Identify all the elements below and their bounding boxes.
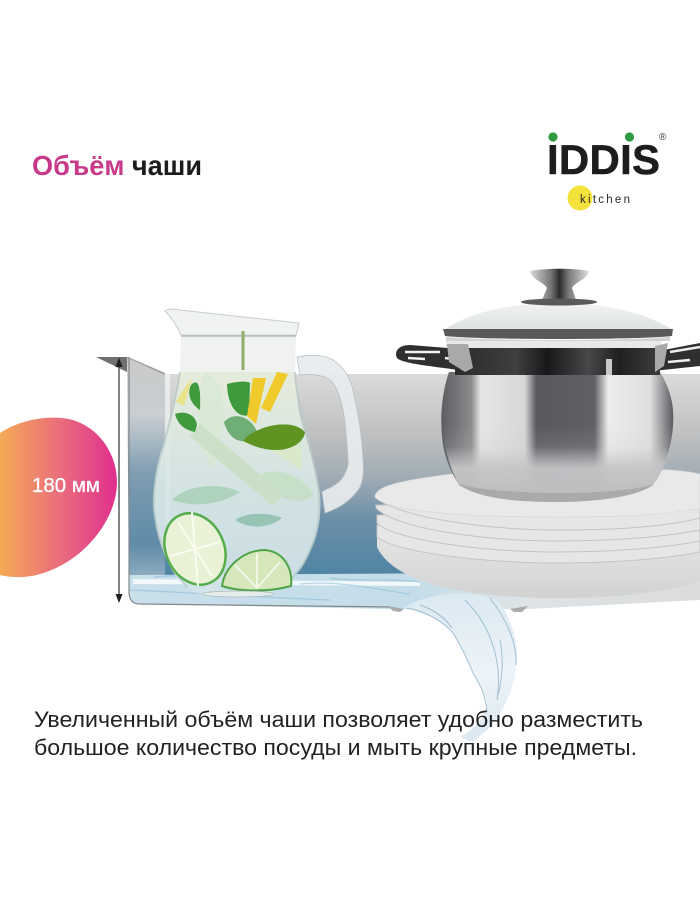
dark mint leaves [175, 382, 257, 441]
outer edge [129, 357, 390, 607]
lid rim highlight [446, 337, 670, 341]
body lower fade [442, 425, 673, 496]
logo wordmark: IDDIS [547, 136, 660, 183]
lowest plate [377, 530, 700, 598]
back wall [165, 374, 700, 576]
water strokes [407, 598, 516, 712]
right handle [653, 343, 700, 371]
height arrow [116, 358, 122, 603]
left handle [396, 345, 473, 372]
right segments [235, 553, 280, 588]
lid dome [444, 303, 673, 330]
arrow line [118, 364, 120, 598]
size badge [0, 418, 117, 577]
jug neck [180, 334, 296, 374]
logo mark: yellow circle [568, 186, 592, 210]
rim feet [388, 606, 528, 612]
pale leaves [172, 373, 314, 527]
plate stack [375, 469, 700, 598]
left bracket [447, 344, 473, 372]
neck ring [181, 335, 296, 337]
mint stem [242, 331, 244, 370]
arrow heads [116, 358, 122, 603]
floor highlight [133, 579, 420, 586]
silver lip [446, 340, 661, 348]
kitchen label: kitchen [580, 194, 630, 206]
jug body [154, 372, 320, 595]
pot base [458, 484, 654, 502]
sink bowl [96, 357, 700, 612]
lime slice right [222, 550, 291, 590]
badge blob [0, 418, 117, 577]
jug handle [297, 355, 363, 513]
registered mark: ® [659, 132, 667, 143]
knob cap [530, 269, 589, 300]
description text [34, 707, 643, 760]
lip edge [126, 357, 165, 375]
plate layers [375, 495, 700, 563]
bowl floor [129, 572, 700, 609]
line 2: большое количество посуды и мыть крупные предметы. [34, 735, 637, 760]
lime slice left [153, 503, 237, 595]
logo: iddis kitchen [547, 132, 667, 210]
knob base [521, 298, 597, 306]
water stream [405, 593, 517, 742]
dark band [455, 348, 660, 375]
jug base [202, 591, 274, 597]
badge value: 180 мм [32, 474, 100, 497]
band highlight [606, 359, 612, 375]
floor water streaks [130, 576, 420, 600]
top plate [375, 469, 700, 517]
right bracket [655, 343, 668, 372]
jug rim [165, 309, 299, 335]
pot [396, 269, 700, 502]
top lip [96, 357, 127, 372]
side wall [127, 357, 165, 590]
lid rim [443, 329, 673, 339]
lime rind [153, 503, 237, 595]
inner corner highlight [165, 374, 170, 524]
knob [521, 269, 597, 306]
jug [153, 309, 363, 597]
water spill [405, 593, 517, 742]
right handle highlight [668, 347, 700, 362]
lime segments [170, 512, 220, 586]
right rind [222, 550, 291, 590]
pot body [441, 372, 673, 496]
lime half [243, 424, 305, 450]
lemon slices [176, 372, 288, 424]
logo dots [548, 132, 634, 142]
title: Объём чаши [32, 150, 202, 181]
left handle highlight [405, 352, 470, 361]
line 1: Увеличенный объём чаши позволяет удобно разместить [34, 707, 643, 732]
glass edge [154, 372, 319, 587]
